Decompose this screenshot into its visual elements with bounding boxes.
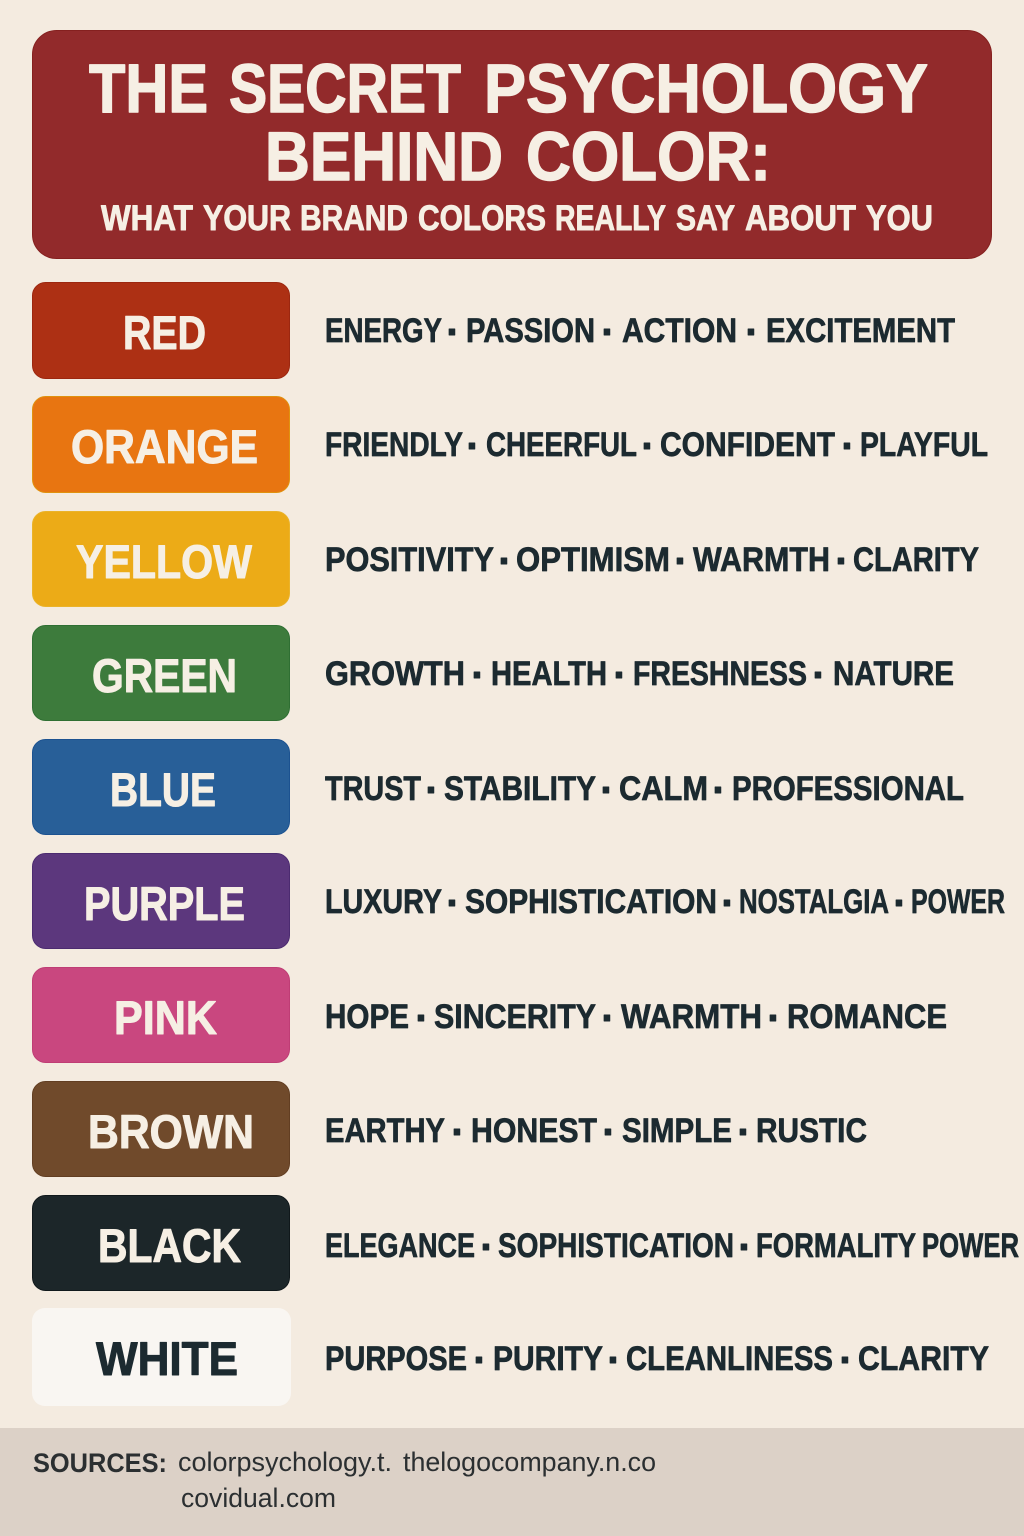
traits: orange: · xyxy=(466,424,480,468)
source links: colorpsychology.t. xyxy=(178,1447,392,1477)
traits: pink: WARMTH xyxy=(621,998,762,1036)
traits: white: CLEANLINESS xyxy=(626,1340,833,1378)
traits: yellow xyxy=(325,540,979,584)
traits: white: PURITY xyxy=(493,1340,603,1378)
traits: green: GROWTH xyxy=(325,655,465,693)
swatch: white xyxy=(32,1308,291,1406)
traits: purple: LUXURY xyxy=(325,883,442,921)
traits: green: · xyxy=(812,654,826,698)
swatch: blue xyxy=(32,740,290,834)
traits: red: ENERGY xyxy=(325,312,442,350)
row: orange xyxy=(32,396,988,492)
subtitle: ABOUT xyxy=(745,199,856,238)
traits: white: · xyxy=(839,1338,853,1382)
panel: sources footer xyxy=(0,1428,1024,1536)
traits: black xyxy=(325,1226,1019,1270)
traits: yellow: CLARITY xyxy=(853,541,979,579)
subtitle xyxy=(101,199,933,238)
traits: yellow: OPTIMISM xyxy=(516,541,670,579)
traits: green: · xyxy=(613,654,627,698)
traits: black: ELEGANCE xyxy=(325,1227,475,1265)
title line 1: THE xyxy=(89,50,208,127)
traits: black: SOPHISTICATION xyxy=(498,1227,734,1265)
row: white xyxy=(32,1308,989,1406)
subtitle: SAY xyxy=(676,199,735,238)
traits: orange: FRIENDLY xyxy=(325,426,463,464)
swatch: brown xyxy=(32,1082,290,1176)
swatch: green: GREEN xyxy=(92,649,237,702)
traits: purple: SOPHISTICATION xyxy=(465,883,717,921)
traits: white: · xyxy=(607,1338,621,1382)
sources label: SOURCES: xyxy=(33,1448,167,1478)
swatch: white: WHITE xyxy=(96,1332,238,1385)
swatch: yellow xyxy=(32,512,290,606)
traits: blue: STABILITY xyxy=(444,770,596,808)
row: pink xyxy=(32,968,947,1062)
traits: orange xyxy=(325,424,988,468)
subtitle: WHAT xyxy=(101,199,193,238)
traits: brown: · xyxy=(451,1110,465,1154)
traits: yellow: · xyxy=(835,540,849,584)
swatch: purple xyxy=(32,854,290,948)
swatch: pink: PINK xyxy=(114,991,217,1044)
panel: title banner xyxy=(32,30,992,258)
traits: orange: · xyxy=(841,424,855,468)
traits: red xyxy=(325,310,955,354)
traits: blue: · xyxy=(712,768,726,812)
traits: brown: SIMPLE xyxy=(622,1112,732,1150)
swatch: red: RED xyxy=(123,306,206,359)
swatch: orange xyxy=(32,396,290,492)
traits: green: · xyxy=(471,654,485,698)
traits: blue: CALM xyxy=(619,770,708,808)
title line 2: BEHIND xyxy=(265,118,503,195)
traits: red: · xyxy=(745,310,759,354)
title line 2: COLOR: xyxy=(526,118,771,195)
traits: orange: · xyxy=(641,424,655,468)
traits: orange: CONFIDENT xyxy=(660,426,835,464)
traits: brown: · xyxy=(737,1110,751,1154)
subtitle: BRAND xyxy=(300,199,408,238)
swatch: pink xyxy=(32,968,290,1062)
subtitle: COLORS xyxy=(418,199,546,238)
traits: brown: RUSTIC xyxy=(756,1112,867,1150)
traits: yellow: WARMTH xyxy=(693,541,830,579)
traits: blue: TRUST xyxy=(325,770,421,808)
title line 2 xyxy=(265,118,771,195)
traits: white xyxy=(325,1338,989,1382)
subtitle: YOUR xyxy=(203,199,291,238)
title line 1 xyxy=(89,50,928,127)
row: purple xyxy=(32,854,1005,948)
traits: blue xyxy=(325,768,964,812)
traits: brown xyxy=(325,1110,867,1154)
traits: purple: · xyxy=(446,882,460,926)
source links: thelogocompany.n.co xyxy=(403,1447,656,1477)
traits: white: CLARITY xyxy=(858,1340,989,1378)
traits: black: FORMALITY xyxy=(756,1227,916,1265)
traits: pink: · xyxy=(415,996,429,1040)
row: black xyxy=(32,1196,1019,1290)
swatch: red xyxy=(32,282,290,378)
traits: red: · xyxy=(446,310,460,354)
traits: purple: NOSTALGIA xyxy=(739,883,889,921)
traits: brown: · xyxy=(602,1110,616,1154)
traits: black: · xyxy=(738,1226,752,1270)
traits: pink: · xyxy=(767,996,781,1040)
traits: red: · xyxy=(601,310,615,354)
traits: yellow: · xyxy=(674,540,688,584)
traits: purple: · xyxy=(893,882,907,926)
traits: blue: · xyxy=(425,768,439,812)
traits: brown: HONEST xyxy=(471,1112,597,1150)
row: red xyxy=(32,282,955,378)
row: blue xyxy=(32,740,964,834)
traits: pink: HOPE xyxy=(325,998,409,1036)
source links: covidual.com xyxy=(181,1483,336,1513)
traits: brown: EARTHY xyxy=(325,1112,445,1150)
traits: purple: · xyxy=(721,882,735,926)
traits: white: PURPOSE xyxy=(325,1340,467,1378)
traits: red: EXCITEMENT xyxy=(766,312,955,350)
traits: pink: ROMANCE xyxy=(787,998,947,1036)
traits: red: PASSION xyxy=(466,312,595,350)
swatch: black: BLACK xyxy=(98,1219,241,1272)
swatch: orange: ORANGE xyxy=(71,420,258,473)
swatch: black xyxy=(32,1196,290,1290)
traits: black: · xyxy=(480,1226,494,1270)
swatch: yellow: YELLOW xyxy=(76,535,253,588)
subtitle: REALLY xyxy=(555,199,666,238)
title line 1: PSYCHOLOGY xyxy=(484,50,928,127)
swatch: purple: PURPLE xyxy=(84,877,245,930)
traits: orange: CHEERFUL xyxy=(486,426,637,464)
subtitle: YOU xyxy=(866,199,933,238)
traits: green: FRESHNESS xyxy=(633,655,807,693)
traits: red: ACTION xyxy=(622,312,737,350)
traits: green xyxy=(325,654,954,698)
traits: blue: PROFESSIONAL xyxy=(732,770,964,808)
row: brown xyxy=(32,1082,867,1176)
title line 1: SECRET xyxy=(229,50,461,127)
traits: pink: SINCERITY xyxy=(434,998,596,1036)
traits: blue: · xyxy=(600,768,614,812)
traits: yellow: · xyxy=(498,540,512,584)
swatch: brown: BROWN xyxy=(88,1105,254,1158)
swatch: green xyxy=(32,626,290,720)
traits: white: · xyxy=(473,1338,487,1382)
traits: purple xyxy=(325,882,1005,926)
traits: green: NATURE xyxy=(833,655,954,693)
source links xyxy=(178,1447,656,1513)
swatch: blue: BLUE xyxy=(110,763,216,816)
traits: orange: PLAYFUL xyxy=(860,426,988,464)
row: green xyxy=(32,626,954,720)
row: yellow xyxy=(32,512,979,606)
traits: green: HEALTH xyxy=(491,655,607,693)
traits: pink: · xyxy=(601,996,615,1040)
traits: yellow: POSITIVITY xyxy=(325,541,494,579)
traits: pink xyxy=(325,996,947,1040)
